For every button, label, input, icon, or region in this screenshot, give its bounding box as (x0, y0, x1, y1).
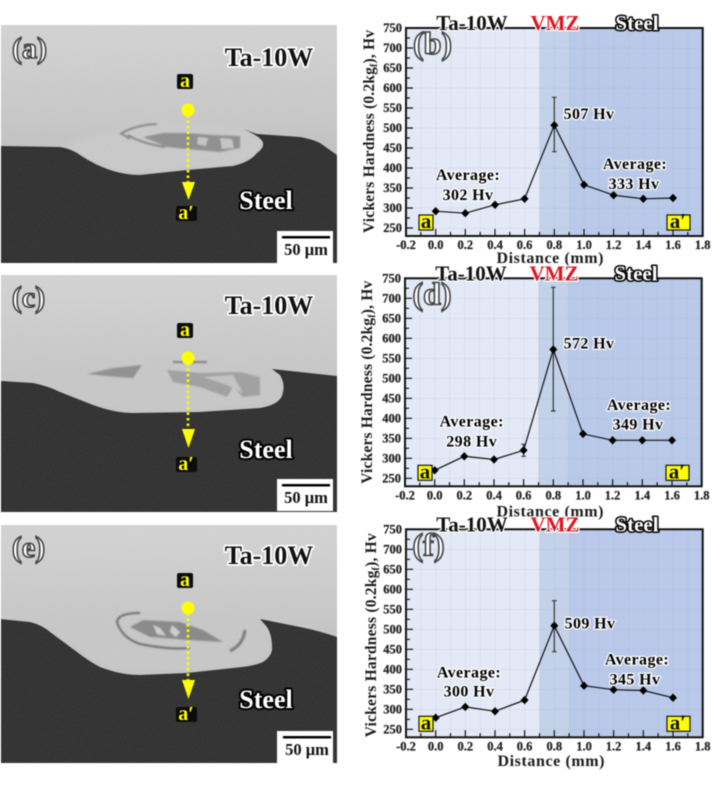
x tick labels: 0.2 (457, 739, 473, 753)
y axis title: Vickers Hardness (0.2kg (363, 571, 380, 737)
annotation left average: 300 Hv (444, 684, 494, 701)
y axis title: f (369, 63, 380, 67)
hardness line (436, 626, 673, 718)
y tick labels: 650 (383, 61, 402, 75)
x tick labels: 0.6 (517, 238, 532, 252)
y tick labels: 550 (383, 101, 402, 115)
y tick labels: 600 (382, 331, 401, 345)
label (c): (c) (12, 281, 45, 314)
texture noise (2, 136, 336, 262)
annotation right average (605, 651, 669, 688)
x tick labels: -0.2 (395, 488, 415, 502)
x tick labels: 0.4 (486, 488, 503, 502)
zone label VMZ: VMZ (530, 512, 580, 536)
x tick labels (396, 739, 711, 753)
y tick labels: 650 (382, 311, 401, 325)
annotation right average: Average: (607, 397, 671, 414)
marker a: a (421, 209, 432, 233)
marker a (177, 319, 193, 341)
label (e): (e) (12, 531, 45, 564)
y tick labels: 600 (383, 81, 402, 95)
measurement path arrow a to a' (182, 602, 195, 699)
error bars (521, 287, 556, 456)
annotation right average: Average: (603, 156, 667, 173)
y axis title: Vickers Hardness (0.2kg (359, 318, 376, 484)
x tick labels (396, 238, 711, 252)
x tick labels: 1.4 (635, 238, 652, 252)
steel region (0, 369, 337, 512)
annotation right average: 349 Hv (613, 416, 663, 433)
inclusions (120, 124, 240, 152)
data points (431, 345, 676, 474)
annotation right average: 345 Hv (610, 671, 660, 688)
weld bulge (101, 658, 244, 672)
x tick labels: 1.2 (606, 739, 621, 753)
error bar (552, 601, 557, 652)
marker a: a (180, 569, 190, 591)
y tick labels: 700 (382, 291, 401, 305)
y tick labels: 700 (383, 41, 402, 55)
texture noise (2, 372, 336, 512)
x tick labels (395, 488, 710, 502)
y tick labels: 400 (383, 161, 402, 175)
y tick labels: 400 (382, 411, 401, 425)
marker a prime: a′ (178, 703, 194, 725)
annotation right average: Average: (605, 651, 669, 668)
y axis title: Vickers Hardness (0.2kg (361, 67, 378, 233)
y axis title: ), Hv (363, 533, 380, 567)
marker a (177, 569, 193, 591)
panel (c): micrograph (0, 275, 337, 512)
y tick labels: 500 (383, 622, 402, 636)
y tick labels (382, 271, 401, 485)
x tick labels: 1.8 (694, 488, 710, 502)
y tick labels: 250 (383, 221, 402, 235)
marker a: a (420, 459, 431, 483)
y tick labels: 700 (383, 542, 402, 556)
panel label (d): (d) (412, 275, 452, 311)
weld bulge (0, 361, 284, 413)
panel label (f): (f) (413, 526, 444, 562)
x tick labels: 0.0 (428, 238, 444, 252)
Ta-10W background (0, 524, 338, 676)
x tick labels: 1.0 (576, 238, 592, 252)
x tick labels: 1.4 (634, 488, 651, 502)
marker a prime: a′ (178, 202, 194, 224)
x tick labels: 0.6 (517, 739, 532, 753)
annotation peak: 507 Hv (564, 106, 614, 123)
x tick labels: 0.6 (516, 488, 531, 502)
annotation right average: 333 Hv (609, 176, 659, 193)
measurement path arrow a to a' (182, 352, 195, 448)
y tick labels: 500 (382, 371, 401, 385)
annotation left average: Average: (436, 167, 500, 184)
y tick labels: 550 (382, 351, 401, 365)
y tick labels: 750 (383, 21, 402, 35)
hardness line (436, 125, 673, 213)
y tick labels (383, 522, 402, 736)
y tick labels: 350 (383, 181, 402, 195)
marker a: a (421, 710, 432, 734)
x tick labels: 1.0 (575, 488, 591, 502)
y tick labels: 300 (383, 201, 402, 215)
zone label VMZ: VMZ (530, 11, 580, 35)
y tick labels: 350 (382, 431, 401, 445)
x axis title: Distance (mm) (496, 503, 604, 520)
label (a): (a) (12, 32, 47, 65)
y axis title: ), Hv (359, 281, 376, 314)
y tick labels: 450 (383, 642, 402, 656)
y tick labels: 650 (383, 562, 402, 576)
x axis title: Distance (mm) (496, 250, 604, 267)
y tick labels: 750 (383, 522, 402, 536)
label Steel: Steel (239, 186, 293, 215)
y tick labels: 250 (382, 471, 401, 485)
annotation peak: 509 Hv (565, 615, 615, 632)
x tick labels: 1.6 (664, 488, 680, 502)
x tick labels: 0.2 (457, 238, 473, 252)
zone label VMZ: VMZ (530, 261, 578, 285)
x tick labels: 1.2 (606, 238, 621, 252)
x tick labels: 1.4 (635, 739, 652, 753)
inclusions (87, 362, 260, 397)
y tick labels: 450 (382, 391, 401, 405)
y tick labels: 250 (383, 722, 402, 736)
annotation left average: Average: (440, 414, 504, 431)
zone label Ta-10W: Ta-10W (436, 11, 508, 35)
steel region (0, 619, 337, 763)
panel label (b): (b) (413, 25, 452, 61)
x tick labels: 1.2 (605, 488, 620, 502)
panel (f): hardness chart (363, 512, 711, 770)
x tick labels: 0.8 (546, 238, 562, 252)
annotation right average (603, 156, 667, 193)
annotation right average (607, 397, 671, 433)
annotation peak: 572 Hv (564, 335, 614, 352)
x tick labels: 0.0 (428, 739, 444, 753)
label Steel: Steel (239, 685, 293, 714)
marker a prime: a′ (670, 710, 686, 734)
marker a: a (180, 70, 190, 92)
x tick labels: 0.2 (456, 488, 472, 502)
x tick labels: 0.4 (487, 238, 504, 252)
x tick labels: 0.8 (545, 488, 561, 502)
annotation left average: Average: (437, 664, 501, 681)
error bar (552, 97, 557, 152)
measurement path arrow a to a' (182, 104, 195, 200)
y tick labels: 300 (382, 451, 401, 465)
annotation left average (436, 167, 500, 204)
zone label Ta-10W: Ta-10W (435, 261, 507, 285)
x tick labels: 1.6 (665, 238, 681, 252)
y tick labels: 600 (383, 582, 402, 596)
panel (b): hardness chart (361, 11, 711, 267)
annotation left average: 302 Hv (443, 187, 493, 204)
label Ta-10W: Ta-10W (225, 291, 313, 320)
steel region (0, 129, 337, 263)
y tick labels: 350 (383, 682, 402, 696)
label Ta-10W: Ta-10W (225, 541, 313, 570)
x tick labels: 1.6 (665, 739, 681, 753)
x tick labels: 1.0 (576, 739, 592, 753)
data points (432, 622, 677, 722)
x tick labels: 0.0 (427, 488, 443, 502)
marker a: a (180, 319, 190, 341)
y tick labels: 750 (382, 271, 401, 285)
scale bar (277, 231, 333, 263)
panel (a): micrograph (0, 25, 337, 263)
y axis title: f (371, 566, 382, 570)
scale bar (277, 731, 333, 763)
y tick labels: 450 (383, 141, 402, 155)
y tick labels: 550 (383, 602, 402, 616)
x tick labels: 1.8 (695, 739, 711, 753)
Ta-10W background (0, 24, 338, 176)
marker a prime: a′ (670, 209, 686, 233)
x tick labels: 0.4 (487, 739, 504, 753)
x axis title: Distance (mm) (498, 753, 604, 770)
label Ta-10W: Ta-10W (225, 43, 313, 72)
hardness line (435, 350, 672, 470)
Ta-10W background (0, 274, 338, 414)
data points (432, 121, 677, 217)
zone label Steel: Steel (614, 261, 658, 285)
marker a (177, 70, 193, 92)
inclusions (117, 613, 245, 651)
annotation left average (440, 414, 504, 451)
annotation left average (437, 664, 501, 701)
y axis title: ), Hv (361, 30, 378, 63)
panel (d): hardness chart (359, 261, 710, 520)
x tick labels: -0.2 (396, 739, 416, 753)
y tick labels: 500 (383, 121, 402, 135)
y axis title: f (367, 314, 378, 318)
x tick labels: -0.2 (396, 238, 416, 252)
panel (e): micrograph (0, 525, 337, 763)
zone label Steel: Steel (615, 11, 659, 35)
y tick labels: 400 (383, 662, 402, 676)
scale bar (277, 479, 333, 511)
zone label Steel: Steel (615, 512, 659, 536)
annotation left average: 298 Hv (446, 434, 497, 451)
zone label Ta-10W: Ta-10W (436, 512, 508, 536)
x tick labels: 1.8 (695, 238, 711, 252)
y tick labels (383, 21, 402, 235)
marker a prime: a′ (669, 459, 685, 483)
scale bar: 50 μm (284, 240, 328, 259)
y tick labels: 300 (383, 702, 402, 716)
weld bulge (84, 148, 254, 174)
x tick labels: 0.8 (546, 739, 562, 753)
scale bar: 50 μm (285, 740, 329, 759)
scale bar: 50 μm (284, 488, 328, 507)
label Steel: Steel (239, 435, 293, 464)
texture noise (2, 620, 336, 762)
marker a prime: a′ (178, 453, 194, 475)
